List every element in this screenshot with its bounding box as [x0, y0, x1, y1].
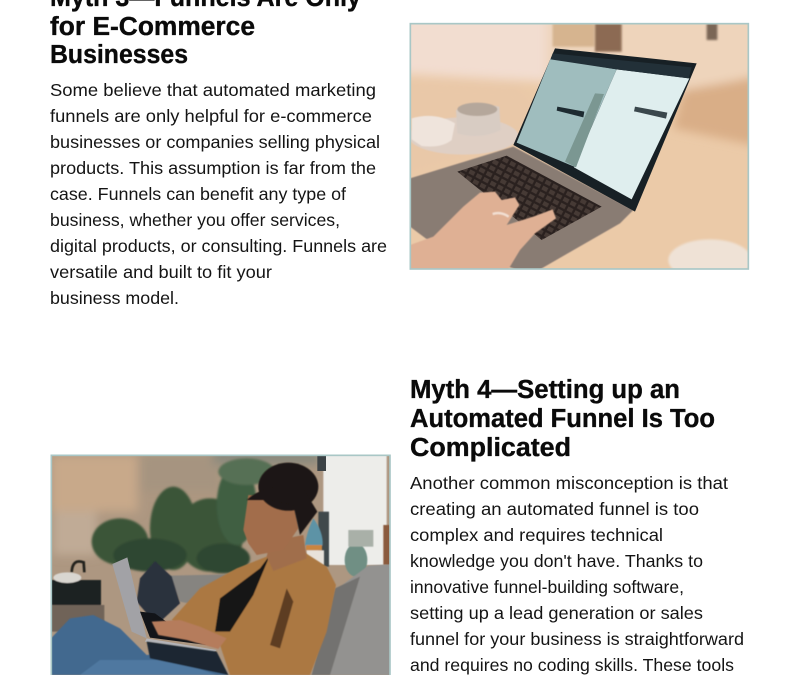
- window: [323, 455, 387, 565]
- screen left panel: [517, 58, 617, 167]
- side table: [51, 561, 104, 632]
- photo: hand typing on a laptop: [410, 22, 750, 270]
- pillow: [137, 561, 180, 625]
- heading: Myth 3: [50, 0, 362, 69]
- text block: Myth 3 body: funnels are only helpful for e-commerce: [50, 106, 372, 126]
- neck and head: [243, 495, 307, 571]
- jacket: [172, 552, 336, 675]
- screen right panel: [574, 69, 689, 199]
- heading: Myth 4: Complicated: [410, 434, 571, 462]
- text block: Myth 4 body: complex and requires technical: [410, 525, 663, 545]
- text block: Myth 4 body: funnel for your business is straightforward: [410, 629, 744, 649]
- laptop screen bezel: [513, 48, 697, 212]
- heading: Myth 3: Businesses: [50, 41, 188, 69]
- heading: Myth 3: for E-Commerce: [50, 13, 255, 41]
- laptop base: [410, 147, 633, 269]
- hair: [247, 463, 318, 535]
- hands: [152, 620, 227, 649]
- plants: [92, 458, 275, 573]
- text block: Myth 3 body: versatile and built to fit your: [50, 262, 272, 282]
- text block: Myth 3 body: digital products, or consulting. Funnels are: [50, 236, 387, 256]
- text block: Myth 4 body: Another common misconception is that: [410, 473, 728, 493]
- text block: Myth 3 body: [50, 80, 387, 308]
- blurred mug: [668, 238, 748, 268]
- laptop: [112, 557, 147, 638]
- vases: [305, 518, 390, 577]
- plate and cups: [408, 103, 518, 155]
- jeans: [51, 615, 228, 675]
- text block: Myth 4 body: knowledge you don't have. Thanks to: [410, 551, 703, 571]
- text block: Myth 4 body: creating an automated funnel is too: [410, 499, 699, 519]
- text block: Myth 4 body: [410, 473, 744, 675]
- text block: Myth 3 body: business model.: [50, 288, 179, 308]
- text block: Myth 3 body: businesses or companies selling physical: [50, 132, 380, 152]
- hand: [410, 192, 556, 269]
- text block: Myth 3 body: products. This assumption is far from the: [50, 158, 376, 178]
- keyboard: [457, 156, 602, 240]
- sofa: [170, 564, 390, 675]
- text block: Myth 3 body: case. Funnels can benefit any type of: [50, 184, 346, 204]
- text block: Myth 4 body: setting up a lead generation or sales: [410, 603, 703, 623]
- heading: Myth 4: Automated Funnel Is Too: [410, 405, 715, 433]
- text block: Myth 4 body: and requires no coding skills. These tools: [410, 655, 734, 675]
- text block: Myth 4 body: innovative funnel-building software,: [410, 577, 684, 597]
- heading: Myth 4: [410, 376, 715, 462]
- text block: Myth 3 body: Some believe that automated marketing: [50, 80, 376, 100]
- photo: woman working on a laptop on a sofa: [51, 448, 390, 675]
- heading: Myth 4: Myth 4—Setting up an: [410, 376, 680, 404]
- text block: Myth 3 body: business, whether you offer services,: [50, 210, 340, 230]
